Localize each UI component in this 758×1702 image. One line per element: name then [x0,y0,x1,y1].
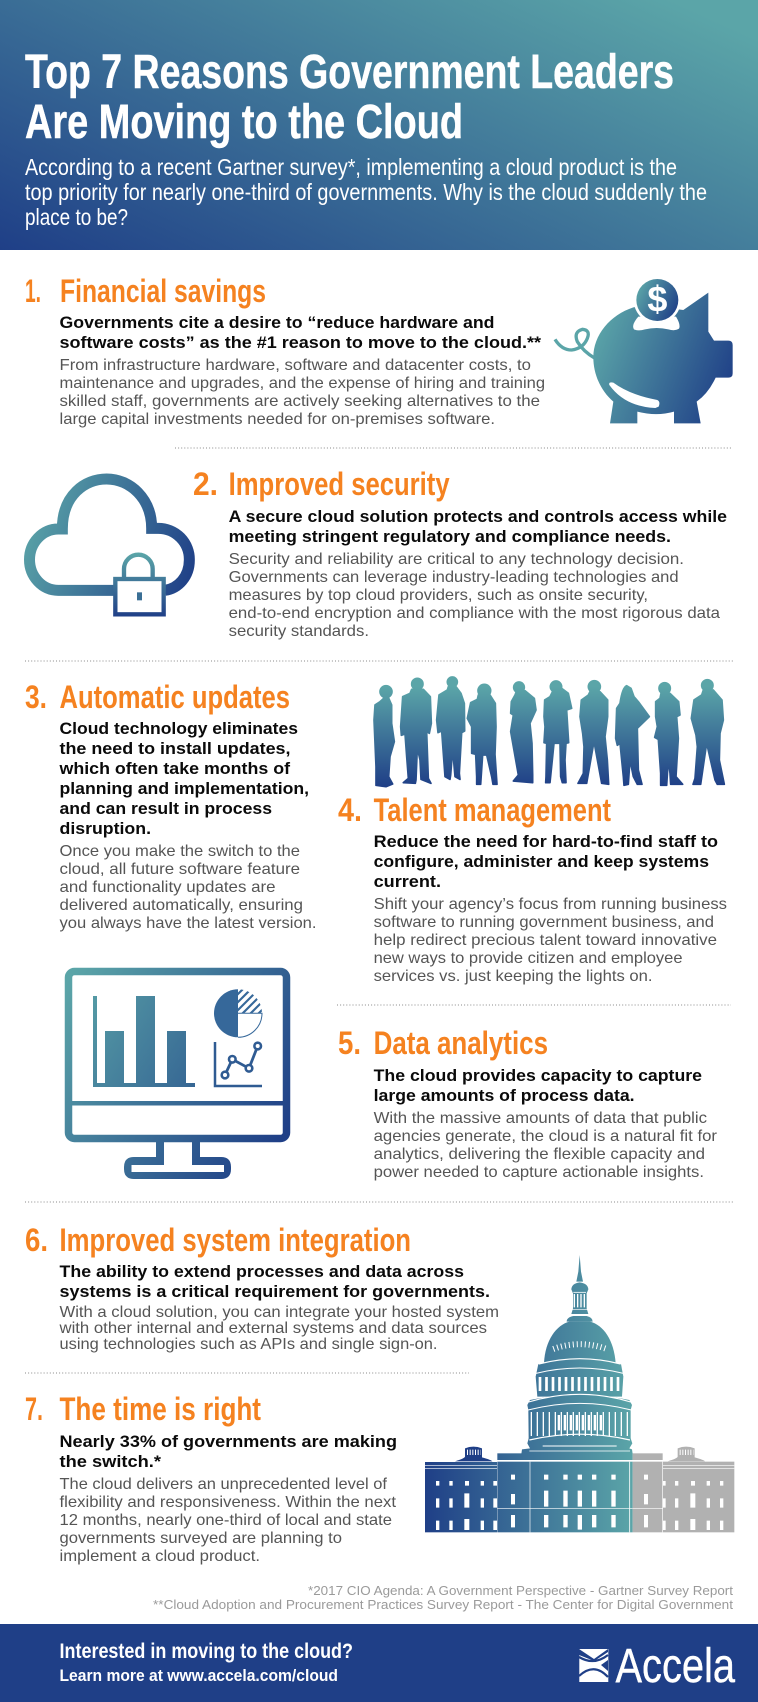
section 7: the time is right [25,1391,397,1565]
body 6: With a cloud solution, you can integrate your hosted system [60,1304,499,1321]
body 3 [60,843,316,932]
subhead 5: The cloud provides capacity to capture [374,1066,702,1085]
footnotes: *2017 CIO Agenda: A Government Perspective - Gartner Survey Report [308,1583,733,1598]
capitol dome [521,1255,633,1454]
body 7: governments surveyed are planning to [60,1530,342,1547]
body 5 [374,1110,718,1181]
body 6: using technologies such as APIs and single sign-on. [60,1336,438,1353]
subhead 5 [374,1066,702,1105]
body 3: Once you make the switch to the [60,843,300,860]
heading 5 [338,1025,548,1061]
subhead 3: the need to install updates, [60,739,290,758]
body 3: and functionality updates are [60,879,276,896]
body 5: analytics, delivering the flexible capacity and [374,1146,705,1163]
section 5: data analytics [338,1025,718,1181]
subhead 3: Cloud technology eliminates [60,719,298,738]
subhead 5: large amounts of process data. [374,1086,635,1105]
body 2: Security and reliability are critical to any technology decision. [229,551,684,568]
subhead 3 [58,719,309,838]
body 4: help redirect precious talent toward innovative [374,932,717,949]
capitol left wing [425,1447,497,1532]
intro text: place to be? [25,204,128,230]
subhead 2: meeting stringent regulatory and compliance needs. [229,527,671,546]
body 6 [58,1304,499,1353]
subhead 7: Nearly 33% of governments are making [60,1432,397,1451]
footnotes: **Cloud Adoption and Procurement Practices Survey Report - The Center for Digital Government [153,1597,733,1612]
subhead 6: systems is a critical requirement for governments. [60,1282,490,1301]
heading 1: Financial savings [60,273,266,309]
subhead 3: disruption. [60,819,151,838]
body 2 [229,551,720,640]
subhead 3: which often take months of [58,759,290,778]
subhead 4: current. [374,872,441,891]
heading 6: Improved system integration [60,1222,411,1258]
icon: cloud with padlock [29,479,189,614]
body 7: implement a cloud product. [60,1548,260,1565]
subhead 1 [60,313,541,352]
body 1: maintenance and upgrades, and the expense of hiring and training [60,375,545,392]
subhead 6: The ability to extend processes and data across [60,1262,464,1281]
line chart [215,1042,262,1086]
body 3: you always have the latest version. [60,915,316,932]
logo: Accela: Accela [616,1640,735,1693]
body 4: services vs. just keeping the lights on. [374,968,652,985]
icon: monitor with charts [68,972,286,1179]
subhead 3: and can result in process [60,799,272,818]
icon: piggy bank [555,276,733,423]
section 2: improved security [29,466,727,640]
subhead 4 [374,832,718,891]
heading 3: Automatic updates [60,679,290,715]
subhead 3: planning and implementation, [60,779,309,798]
heading 5: 5. [338,1025,361,1061]
subhead 1: software costs” as the #1 reason to move to the cloud.** [60,333,541,352]
subhead 6 [60,1262,490,1301]
capitol centre block [497,1453,633,1532]
heading 7: The time is right [60,1391,261,1427]
section 6: improved system integration [25,1222,499,1353]
subhead 4: Reduce the need for hard-to-find staff to [374,832,718,851]
icon: row of people silhouettes [374,677,724,787]
bar chart [93,996,195,1087]
body 4: new ways to provide citizen and employee [374,950,683,967]
subhead 2: A secure cloud solution protects and controls access while [229,507,727,526]
logo: Accela [579,1640,735,1693]
heading 7: 7. [25,1391,43,1427]
heading 4: 4. [338,792,362,828]
body 5: agencies generate, the cloud is a natural fit for [374,1128,718,1145]
body 1: large capital investments needed for on-premises software. [60,411,495,428]
body 1: skilled staff, governments are actively seeking alternatives to the [60,393,540,410]
body 4 [374,896,727,985]
body 6: with other internal and external systems and data sources [58,1320,487,1337]
body 5: power needed to capture actionable insights. [374,1164,704,1181]
heading 3: 3. [25,679,47,715]
subhead 4: configure, administer and keep systems [374,852,709,871]
heading 2: Improved security [229,466,450,502]
body 2: measures by top cloud providers, such as onsite security, [229,587,648,604]
capitol right wing [633,1447,734,1532]
subhead 1: Governments cite a desire to “reduce hardware and [60,313,494,332]
heading 4: Talent management [374,792,611,828]
body 2: Governments can leverage industry-leading technologies and [229,569,679,586]
body 2: end-to-end encryption and compliance with the most rigorous data [229,605,720,622]
section 3: automatic updates [25,679,316,932]
body 7: 12 months, nearly one-third of local and state [60,1512,392,1529]
body 1 [60,357,545,428]
subhead 7: the switch.* [60,1452,161,1471]
subhead 2 [229,507,727,546]
body 3: cloud, all future software feature [60,861,300,878]
body 3: delivered automatically, ensuring [60,897,303,914]
body 5: With the massive amounts of data that public [374,1110,707,1127]
icon: piggy bank: $ [647,279,667,320]
footnotes [153,1583,733,1612]
title: Are Moving to the Cloud [25,96,463,149]
section 1: financial savings [25,273,733,428]
icon: capitol building [425,1255,734,1532]
call to action: Learn more at www.accela.com/cloud [60,1667,338,1685]
body 7: flexibility and responsiveness. Within the next [60,1494,397,1511]
intro text [25,154,707,230]
body 1: From infrastructure hardware, software and datacenter costs, to [60,357,531,374]
header banner [0,0,758,250]
pie chart [214,989,262,1038]
heading 6: 6. [25,1222,48,1258]
body 4: Shift your agency’s focus from running business [374,896,727,913]
body 4: software to running government business, and [374,914,714,931]
section 4: talent management [338,677,727,985]
title [25,46,674,149]
heading 1: 1. [25,273,41,309]
subhead 7 [60,1432,397,1471]
footer banner [0,1624,758,1702]
heading 2: 2. [193,466,218,502]
call to action: Interested in moving to the cloud? [60,1640,353,1663]
call to action [60,1640,353,1685]
heading 1 [25,273,266,309]
body 2: security standards. [229,623,369,640]
body 7 [60,1476,397,1565]
heading 5: Data analytics [374,1025,548,1061]
body 7: The cloud delivers an unprecedented level of [60,1476,388,1493]
